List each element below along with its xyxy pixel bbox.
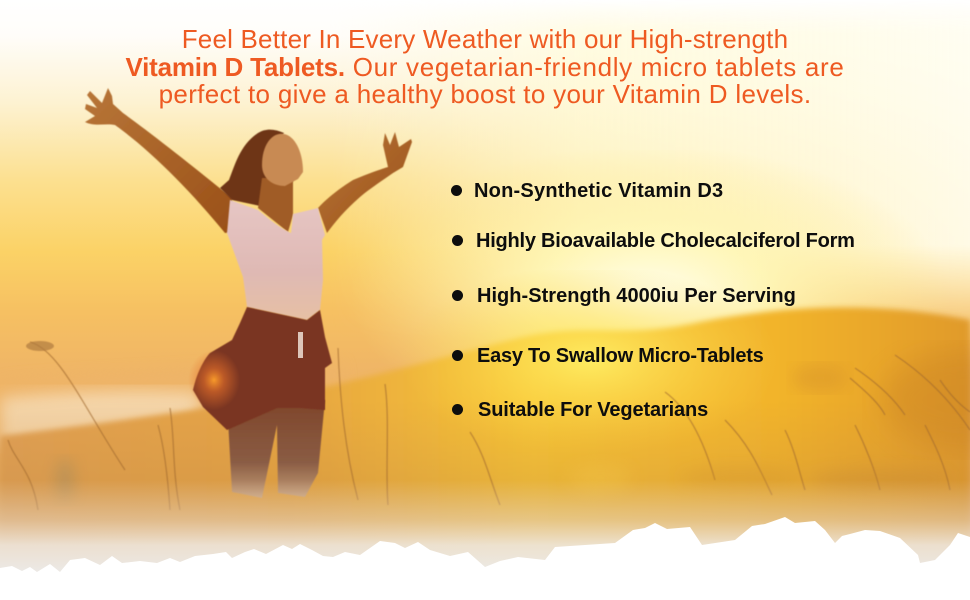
- feature: non-synthetic: Non-Synthetic Vitamin D3: [474, 180, 723, 202]
- hills: [0, 270, 970, 600]
- torn white bottom edge: [0, 517, 970, 600]
- heading: perfect to give a healthy boost to your Vitamin D levels.: [159, 79, 811, 109]
- heading: [125, 24, 845, 109]
- woman's hair: [220, 130, 284, 208]
- woman: [85, 88, 412, 498]
- feature: high strength: High-Strength 4000iu Per Serving: [477, 285, 796, 307]
- heading: Feel Better In Every Weather with our High-strength: [182, 24, 788, 54]
- feature: vegetarians: Suitable For Vegetarians: [478, 399, 708, 421]
- feature: easy to swallow: Easy To Swallow Micro-Tablets: [477, 345, 764, 367]
- feature: bioavailable: Highly Bioavailable Cholecalciferol Form: [476, 230, 855, 252]
- woman's legs: [228, 395, 325, 498]
- woman's tied shirt at waist: [193, 307, 332, 430]
- woman's face: [262, 134, 303, 186]
- woman's right arm and hand: [318, 132, 412, 233]
- woman's left arm and hand: [85, 88, 232, 233]
- heading: Vitamin D Tablets. Our vegetarian-friendly micro tablets are: [125, 52, 845, 82]
- woman's neck: [258, 178, 293, 232]
- woman's shirt: [227, 200, 325, 320]
- grass: [8, 342, 970, 510]
- grass seed head: [26, 341, 54, 351]
- mist and ground fade: [0, 480, 970, 580]
- field texture patches: [57, 458, 950, 502]
